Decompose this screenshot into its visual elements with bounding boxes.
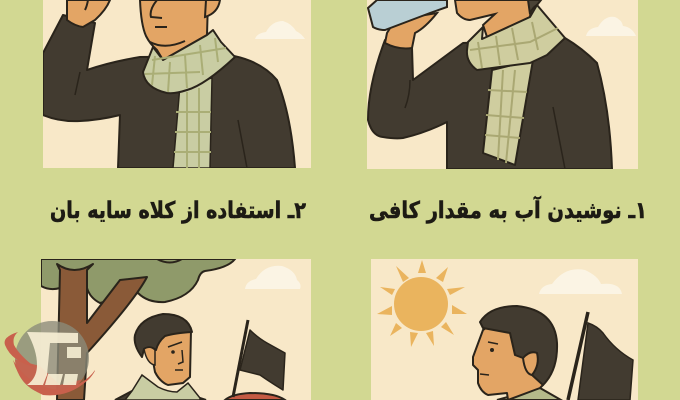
scarf — [483, 60, 533, 165]
panel: drinking water figure, top right — [367, 0, 638, 169]
icon: cloud — [245, 266, 301, 289]
heading: step 1 drinking water: ۱ـ نوشیدن آب به مقدار کافی — [369, 195, 647, 224]
tree canopy — [41, 259, 235, 303]
icon: cloud — [586, 17, 636, 36]
tree trunk — [57, 264, 147, 400]
panel: shade hat figure, top left — [43, 0, 311, 168]
face and neck — [140, 0, 208, 60]
icon: cloud — [255, 21, 305, 39]
hand — [385, 13, 437, 48]
icon: cloud — [539, 269, 622, 294]
jacket — [115, 391, 206, 400]
hair — [135, 314, 192, 357]
red object — [225, 393, 285, 400]
water bottle — [368, 0, 447, 30]
icon: sun — [377, 260, 467, 347]
jacket — [43, 15, 295, 168]
ear — [523, 352, 538, 375]
ear — [144, 347, 155, 365]
hair — [480, 306, 557, 385]
person head — [473, 325, 543, 400]
scarf — [125, 375, 200, 400]
hand — [67, 0, 110, 27]
icon: news agency watermark logo — [4, 321, 95, 396]
panel: tree shade figure, bottom left — [41, 259, 311, 400]
face — [150, 330, 191, 385]
man — [115, 314, 206, 400]
jacket — [368, 38, 612, 169]
panel: sun exposure figure, bottom right — [371, 259, 638, 400]
black flag — [568, 312, 588, 400]
person scarf — [497, 388, 561, 400]
heading: step 2 shade hat: ۲ـ استفاده از کلاه سایه بان — [50, 198, 306, 224]
face and neck — [455, 0, 532, 37]
scarf — [173, 78, 212, 168]
black flag — [233, 320, 248, 397]
